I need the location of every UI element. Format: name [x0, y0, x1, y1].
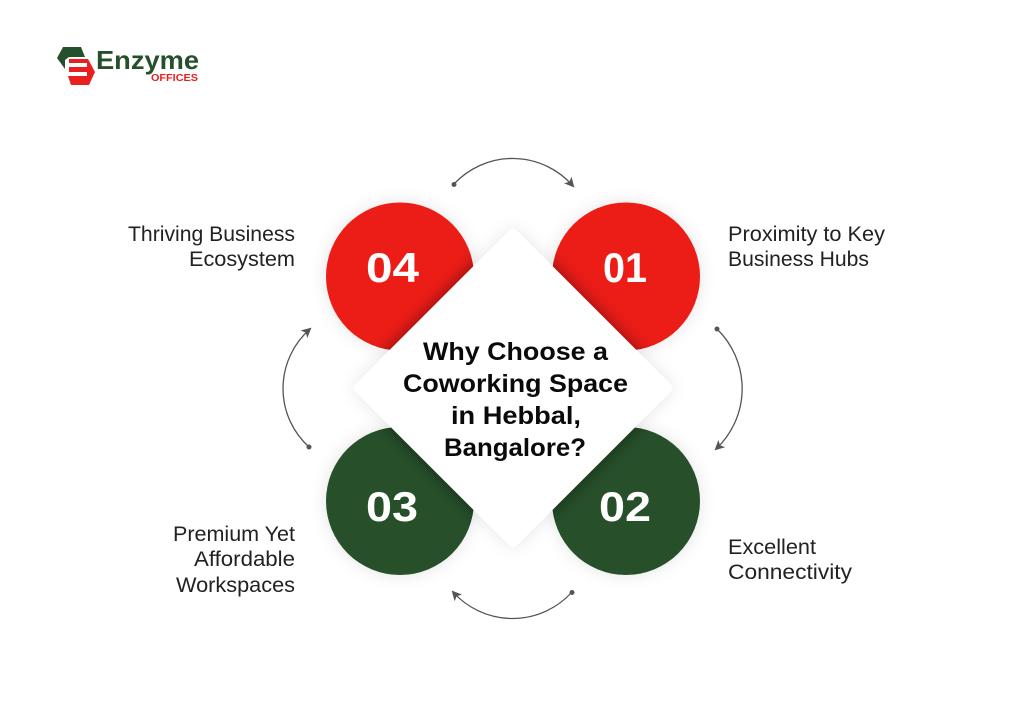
arrow: left, 03 to 04	[283, 329, 312, 450]
circle 01	[552, 202, 700, 350]
number 03: 03	[366, 483, 418, 530]
label: Proximity to Key Business Hubs	[728, 223, 886, 271]
icon: logo hexagon	[57, 47, 95, 85]
label: Thriving Business Ecosystem: Thriving Business	[128, 223, 295, 246]
center title: Why Choose a	[423, 338, 609, 366]
central diamond panel	[352, 227, 674, 549]
label: Premium Yet Affordable Workspaces: Affordable	[194, 548, 295, 571]
circle 04	[326, 202, 474, 350]
label: Premium Yet Affordable Workspaces: Workspaces	[176, 574, 295, 597]
label: Proximity to Key Business Hubs: Business Hubs	[728, 248, 869, 271]
label: Thriving Business Ecosystem	[128, 223, 295, 271]
arrow: right, 01 to 02	[714, 326, 742, 449]
center title: Coworking Space	[403, 370, 628, 398]
label: Premium Yet Affordable Workspaces: Premium Yet	[173, 523, 295, 546]
arrow: bottom, 02 to 03	[453, 590, 574, 619]
label: Excellent Connectivity: Excellent	[728, 536, 816, 559]
label: Premium Yet Affordable Workspaces	[173, 523, 295, 597]
center title: Bangalore?	[444, 434, 586, 462]
logo subtitle: OFFICES	[151, 73, 198, 84]
logo: Enzyme Offices	[57, 45, 199, 85]
logo wordmark: Enzyme	[96, 45, 199, 75]
number 04: 04	[366, 244, 420, 291]
arrow: top, 04 to 01	[452, 158, 573, 187]
center title: in Hebbal,	[451, 402, 581, 430]
circle 02	[552, 427, 700, 575]
label: Thriving Business Ecosystem: Ecosystem	[189, 248, 295, 271]
circle 03	[326, 427, 474, 575]
label: Excellent Connectivity: Connectivity	[728, 561, 853, 584]
number 02: 02	[599, 483, 651, 530]
label: Proximity to Key Business Hubs: Proximity to Key	[728, 223, 886, 246]
number 01: 01	[603, 244, 647, 291]
label: Excellent Connectivity	[728, 536, 853, 584]
center title	[403, 338, 628, 462]
